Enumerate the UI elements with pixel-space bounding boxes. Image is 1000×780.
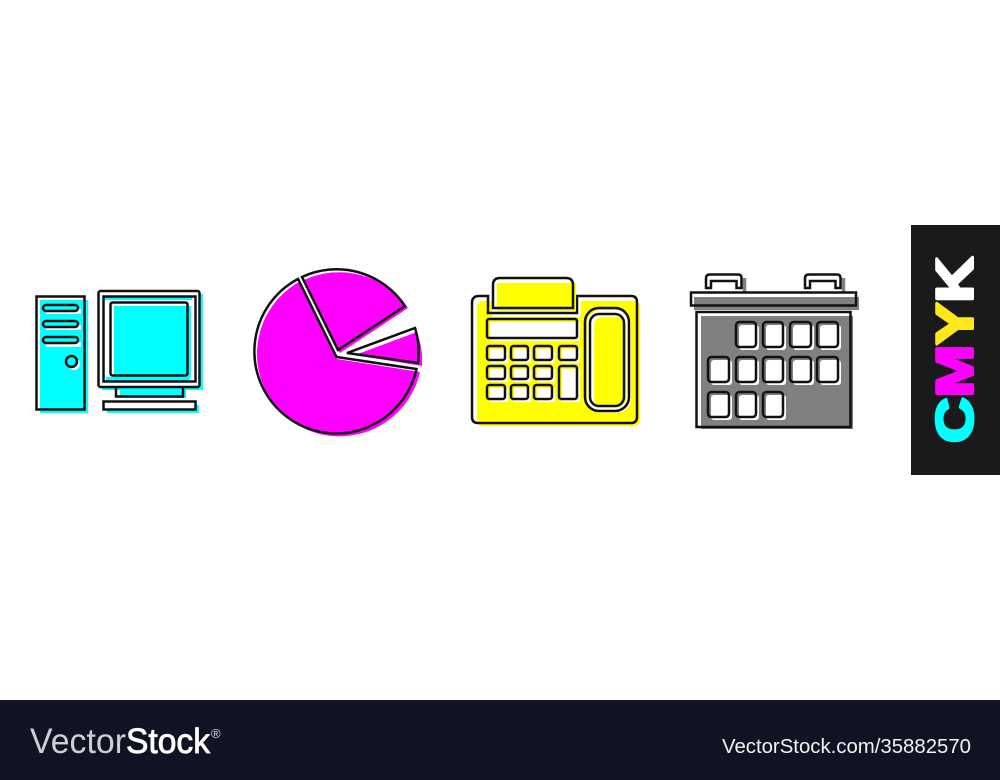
CMYK side badge [911,225,1000,475]
paper feed [493,278,576,311]
battery lid [691,292,859,310]
icon: office telephone [472,278,640,426]
CMYK label: CMYK [926,256,984,443]
icon: car battery [691,274,859,429]
pie slice: upper [302,269,408,353]
battery body [696,312,853,429]
display [487,319,580,341]
VectorStock logo: Stock [126,722,210,761]
phone body [477,301,640,426]
pie slice: large [254,279,420,436]
image id: VectorStock.com/35882570 [722,736,971,758]
keypad [487,346,580,402]
VectorStock logo: Vector [30,722,126,761]
footer bar [0,700,1000,780]
handset [585,308,631,413]
icon: desktop computer [36,291,203,413]
VectorStock logo [30,722,221,761]
icon: pie chart [254,269,422,436]
computer tower [36,296,88,413]
battery cells [708,322,841,420]
battery terminals [706,274,844,292]
VectorStock logo: ® [211,726,221,741]
pie slice: small [347,328,422,366]
monitor [98,291,203,413]
